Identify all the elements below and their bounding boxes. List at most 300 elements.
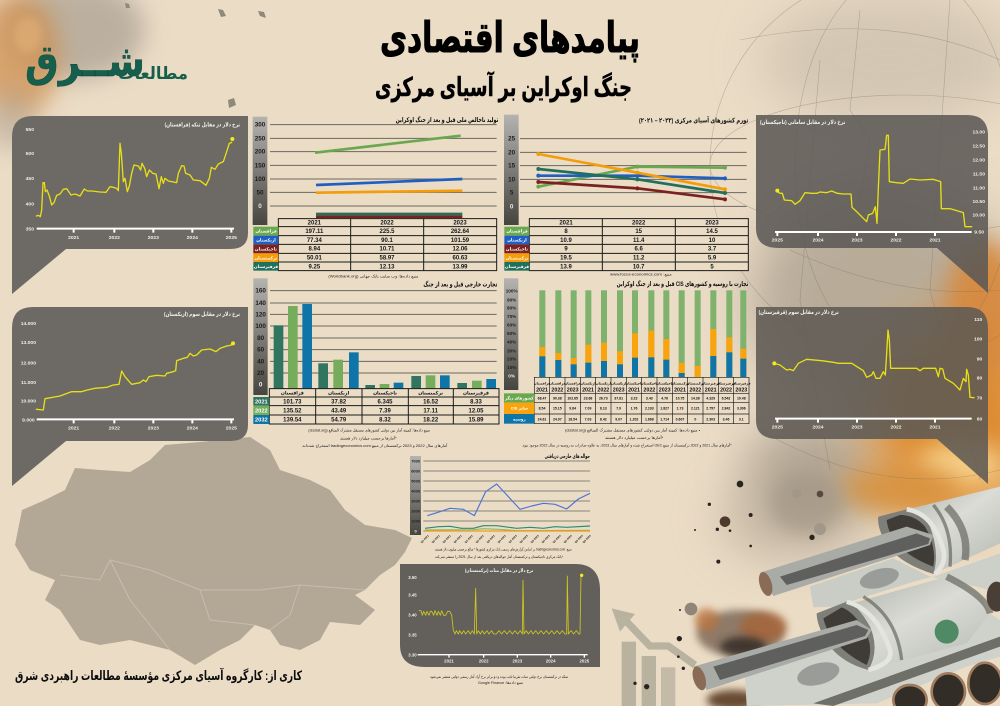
chart: trade with Russia and CIS: تاجیکستان <box>641 381 658 385</box>
logo: شــرق <box>25 37 145 87</box>
chart: trade with Russia and CIS: 2.121 <box>691 407 700 411</box>
panel: Tajikistan exchange rate: 12.50 <box>973 144 985 150</box>
panel: Uzbekistan exchange rate: 2024 <box>187 425 198 431</box>
panel: Turkmenistan exchange rate: نرخ دلار در مقابل منات (ترکمنستان) <box>465 568 533 574</box>
chart: trade with Russia and CIS: 2.842 <box>722 407 730 411</box>
chart: remittances: 1000 <box>411 518 421 523</box>
panel: Kyrgyzstan exchange rate: 90 <box>977 356 983 362</box>
chart: trade with Russia and CIS: 24.97 <box>553 417 562 421</box>
chart: trade with Russia and CIS: تاجیکستان <box>625 381 643 385</box>
chart: inflation <box>504 115 749 277</box>
chart: GDP: تاجیکستان <box>255 246 277 251</box>
chart: trade with Russia and CIS: 3.1 <box>739 417 744 421</box>
chart: foreign trade: 15.89 <box>469 418 484 424</box>
icon: rising arrow with bars <box>612 608 695 706</box>
chart: remittances: Q4-2024 <box>582 534 592 544</box>
panel: Kazakhstan exchange rate: 2021 <box>68 235 79 241</box>
chart: trade with Russia and CIS: 2023 <box>659 387 671 393</box>
bars <box>274 304 496 388</box>
chart: trade with Russia and CIS: 23.68 <box>584 396 592 400</box>
chart: foreign trade: 2021 <box>255 399 268 405</box>
chart: foreign trade: 8.32 <box>379 418 391 424</box>
chart: trade with Russia and CIS: 1.827 <box>660 407 669 411</box>
chart: GDP: 10.71 <box>380 247 395 253</box>
panel: Kazakhstan exchange rate <box>12 116 248 294</box>
chart: GDP: 50.01 <box>307 256 322 262</box>
chart: foreign trade: 37.82 <box>331 399 347 405</box>
chart: inflation: 15 <box>635 229 643 235</box>
chart: trade with Russia and CIS: قزاقستان <box>549 381 566 385</box>
chart: foreign trade: 140 <box>255 300 266 307</box>
panel: Kyrgyzstan exchange rate: 2024 <box>812 425 824 431</box>
chart: trade with Russia and CIS: 68.47 <box>538 396 546 400</box>
panel: Tajikistan exchange rate: 2022 <box>890 238 902 244</box>
panel: Turkmenistan exchange rate <box>400 564 600 667</box>
chart title: تورم کشورهای آسیای مرکزی (۲۰۲۳ – ۲۰۲۱) <box>639 116 749 125</box>
chart: foreign trade <box>253 278 499 448</box>
chart: remittances: Q1-2023 <box>508 534 518 544</box>
chart: trade with Russia and CIS: 2021 <box>582 387 594 393</box>
panel: Kazakhstan exchange rate: 2025 <box>226 235 237 241</box>
chart: trade with Russia and CIS: 50% <box>507 331 517 336</box>
chart: trade with Russia and CIS: 102.65 <box>567 396 578 400</box>
chart: inflation: قرقیزستان <box>505 264 529 269</box>
chart: inflation: 10.7 <box>633 264 645 270</box>
chart: foreign trade: 0 <box>259 382 263 389</box>
chart: foreign trade: 8.33 <box>470 399 482 405</box>
chart: trade with Russia and CIS: کشورهای دیگر <box>504 395 534 400</box>
chart: GDP: 2023 <box>453 221 467 227</box>
panel: Kazakhstan exchange rate: 450 <box>26 176 34 182</box>
panel: Tajikistan exchange rate: 9.50 <box>974 230 984 236</box>
chart: trade with Russia and CIS: روسیه <box>513 416 526 421</box>
source notes <box>522 427 732 448</box>
chart: trade with Russia and CIS: 3.306 <box>737 407 746 411</box>
panel: Uzbekistan exchange rate: 2021 <box>68 425 79 431</box>
chart: GDP: 262.64 <box>451 229 470 235</box>
panel: Kyrgyzstan exchange rate: 2023 <box>851 425 863 431</box>
panel: Turkmenistan exchange rate: 2022 <box>479 658 489 663</box>
chart: GDP: ترکمنستان <box>254 255 278 260</box>
source note: منبع: www.focus-economics.com <box>610 272 672 277</box>
chart: foreign trade: ترکمنستان <box>418 391 443 396</box>
chart: trade with Russia and CIS: 10% <box>507 365 517 370</box>
panel: Tajikistan exchange rate: 12.00 <box>973 158 985 164</box>
chart: trade with Russia and CIS: 100% <box>506 289 518 294</box>
chart: remittances: 7000 <box>411 458 421 463</box>
chart: trade with Russia and CIS: 40% <box>507 340 517 345</box>
source notes: *آمارها برحسب میلیارد دلار هستند <box>340 435 397 440</box>
chart: remittances: Q2-2021 <box>431 534 441 544</box>
chart: inflation: 25 <box>508 136 516 143</box>
source notes: آمارهای سال 2022 و 2023 ترکمنستان از منبع tradingeconomics.com استخراج شده‌اند. <box>301 443 448 448</box>
chart: remittances: Q4-2023 <box>541 534 551 544</box>
panel: Uzbekistan exchange rate: 13.000 <box>21 340 36 346</box>
chart: trade with Russia and CIS: 90.38 <box>553 396 562 400</box>
chart: trade with Russia and CIS: 80% <box>507 306 517 311</box>
chart: foreign trade: 139.54 <box>283 418 302 424</box>
panel: Tajikistan exchange rate: 11.50 <box>973 171 985 177</box>
chart: trade with Russia and CIS: 3.46 <box>723 417 729 421</box>
chart: foreign trade: قرقیزستان <box>463 391 489 396</box>
source notes: منبع داده‌ها: کمیته آمار بین دولتی کشورهای مستقل مشترک المنافع (cisstat.org) <box>308 428 430 433</box>
panel: Tajikistan exchange rate: 10.00 <box>973 213 985 219</box>
panel: Uzbekistan exchange rate: 2025 <box>226 425 237 431</box>
chart: trade with Russia and CIS: 8.54 <box>539 407 545 411</box>
chart: foreign trade: 60 <box>257 347 265 354</box>
chart: trade with Russia and CIS: 30% <box>507 348 517 353</box>
chart: trade with Russia and CIS: سایر CIS <box>511 406 528 411</box>
chart: GDP: 50 <box>256 189 264 196</box>
chart: trade with Russia and CIS: 2022 <box>597 387 609 393</box>
chart: GDP: 197.11 <box>305 229 324 235</box>
chart: trade with Russia and CIS: 60% <box>507 323 517 328</box>
chart: trade with Russia and CIS: 7.03 <box>585 417 591 421</box>
chart: remittances <box>410 454 592 559</box>
panel: Kyrgyzstan exchange rate: 60 <box>977 417 983 423</box>
chart: inflation: 0 <box>510 203 514 210</box>
source note: منبع داده‌ها: وب سایت بانک جهانی (Worldbank.org) <box>328 273 418 278</box>
panel: Tajikistan exchange rate: 13.00 <box>973 130 985 136</box>
chart: trade with Russia and CIS: 90% <box>507 297 517 302</box>
logo: مطالعات <box>118 64 188 83</box>
chart: trade with Russia and CIS: 8.42 <box>600 417 607 421</box>
panel: Tajikistan exchange rate: 11.00 <box>973 186 985 192</box>
chart: inflation: 15 <box>508 163 516 170</box>
debris <box>633 481 826 689</box>
chart: trade with Russia and CIS: 2023 <box>567 387 579 393</box>
panel: Uzbekistan exchange rate: 11.000 <box>21 380 36 386</box>
chart: foreign trade: 120 <box>255 311 266 318</box>
source notes: منبع: tradingeconomics.com بر اساس گزارش‌های رسمی بانک مرکزی کشورها * مبالغ برحسب میلیون دلار هستند <box>435 547 572 552</box>
chart title: تجارت با روسیه و کشورهای CIS قبل و بعد از جنگ اوکراین <box>617 279 749 288</box>
chart: trade with Russia and CIS: 1.202 <box>630 417 638 421</box>
chart: GDP: 225.5 <box>380 229 395 235</box>
source notes: *آمارها برحسب میلیارد دلار هستند <box>605 435 664 440</box>
chart: trade with Russia and CIS: قزاقستان <box>564 381 581 385</box>
chart: trade with Russia and CIS: 1.73 <box>677 407 683 411</box>
chart: GDP: 2022 <box>380 221 394 227</box>
panel: Tajikistan exchange rate: نرخ دلار در مقابل سامانی (تاجیکستان) <box>760 119 845 126</box>
stacked bars <box>539 290 746 377</box>
chart: foreign trade: 100 <box>255 323 266 330</box>
panel: Turkmenistan exchange rate: 2021 <box>444 658 454 663</box>
chart: GDP: 58.97 <box>380 256 395 262</box>
chart: foreign trade: 43.49 <box>331 408 347 414</box>
chart: remittances: 4000 <box>411 488 421 493</box>
chart: trade with Russia and CIS: 7.9 <box>616 407 621 411</box>
chart: foreign trade: 18.22 <box>423 418 439 424</box>
chart: remittances: Q1-2022 <box>464 534 474 544</box>
panel: Turkmenistan exchange rate: 2024 <box>546 658 556 663</box>
panel: Kyrgyzstan exchange rate: 70 <box>977 395 983 401</box>
panel: Uzbekistan exchange rate: نرخ دلار در مقابل سوم (ازبکستان) <box>164 311 240 318</box>
chart: trade with Russia and CIS: 37.81 <box>614 396 623 400</box>
chart: foreign trade: 80 <box>257 335 265 342</box>
chart: GDP: 100 <box>255 176 266 183</box>
panel: Kyrgyzstan exchange rate: 110 <box>974 317 983 323</box>
panel: Uzbekistan exchange rate: 2023 <box>148 425 159 431</box>
chart: inflation: 2022 <box>632 221 646 227</box>
chart: trade with Russia and CIS: 24.61 <box>538 417 546 421</box>
Turkmenistan source notes <box>430 674 569 685</box>
chart: foreign trade: 2022 <box>255 408 268 414</box>
chart: foreign trade: 54.79 <box>331 418 347 424</box>
chart: inflation: 14.5 <box>706 229 718 235</box>
chart: trade with Russia and CIS: 2022 <box>720 387 732 393</box>
panel: Tajikistan exchange rate <box>756 115 988 293</box>
chart: trade with Russia and CIS: 4.76 <box>661 396 668 400</box>
panel: Kazakhstan exchange rate: نرخ دلار در مقابل تنکه (قزاقستان) <box>165 122 240 129</box>
chart: GDP: 200 <box>255 149 266 156</box>
chart: inflation: 10 <box>508 176 516 183</box>
chart: inflation: تاجیکستان <box>506 246 528 251</box>
chart: inflation: 10.9 <box>560 238 572 244</box>
chart: remittances: 3000 <box>411 498 421 503</box>
chart: GDP: 13.99 <box>453 264 468 270</box>
chart: trade with Russia and CIS: 3.43 <box>646 396 653 400</box>
chart: trade with Russia and CIS: 2.757 <box>706 407 715 411</box>
chart: remittances: Q3-2021 <box>442 534 452 544</box>
chart: GDP: قرقیزستان <box>254 264 278 269</box>
chart: trade with Russia and CIS: 6.542 <box>722 396 730 400</box>
chart: trade with Russia and CIS: 2021 <box>674 387 686 393</box>
panel: Turkmenistan exchange rate: 3.45 <box>408 593 417 598</box>
chart: trade with Russia and CIS: ازبکستان <box>611 381 626 385</box>
chart: trade with Russia and CIS: 9.84 <box>569 407 576 411</box>
chart: trade with Russia and CIS: 2023 <box>735 387 747 393</box>
chart: trade with Russia and CIS: 2022 <box>689 387 701 393</box>
panel: Kazakhstan exchange rate: 400 <box>26 201 34 207</box>
chart: trade with Russia and CIS: 1.668 <box>645 417 654 421</box>
panel: Kazakhstan exchange rate: 2023 <box>148 235 159 241</box>
chart: trade with Russia and CIS: 2021 <box>628 387 640 393</box>
chart: GDP: 2021 <box>308 221 322 227</box>
chart: foreign trade: تاجیکستان <box>373 391 397 396</box>
chart: foreign trade: 17.11 <box>423 408 439 414</box>
chart: trade with Russia and CIS: 26.73 <box>599 396 608 400</box>
chart: inflation: 3.7 <box>708 247 717 253</box>
chart: GDP: 250 <box>255 135 266 142</box>
chart: foreign trade: 16.52 <box>423 399 439 405</box>
source notes: *آمارهای سال 2021 و 2022 ترکمنستان از منبع OEC استخراج شده و آمارهای سال 2023، به علاوه صادرات به روسیه در سال 2022 موجود نبود. <box>522 443 732 448</box>
chart: inflation: 20 <box>508 149 516 156</box>
chart: trade with Russia and CIS: تاجیکستان <box>656 381 673 385</box>
panel: Kazakhstan exchange rate: 2024 <box>187 235 198 241</box>
upper rolled note <box>756 487 1000 607</box>
chart: inflation: ترکمنستان <box>505 255 529 260</box>
chart: trade with Russia and CIS: 10.75 <box>676 396 684 400</box>
chart: GDP: 77.34 <box>307 238 322 244</box>
chart: inflation: 2021 <box>559 221 573 227</box>
chart: inflation: 19.5 <box>560 256 572 262</box>
panel: Turkmenistan exchange rate: 3.50 <box>408 575 417 580</box>
panel: Turkmenistan exchange rate: 3.40 <box>408 613 417 618</box>
panel: Kazakhstan exchange rate: 2022 <box>109 235 120 241</box>
chart: trade with Russia and CIS: 70% <box>507 314 517 319</box>
chart: trade with Russia and CIS: 1.76 <box>631 407 637 411</box>
chart: trade with Russia and CIS <box>504 278 751 448</box>
chart: trade with Russia and CIS: 10.48 <box>737 396 746 400</box>
panel: Kyrgyzstan exchange rate: نرخ دلار در مقابل سوم (قرقیزستان) <box>759 310 839 316</box>
chart: foreign trade: 20 <box>257 370 265 377</box>
chart: inflation: 9 <box>564 247 568 253</box>
chart: foreign trade: 2032 <box>255 418 268 424</box>
chart: trade with Russia and CIS: 3.23 <box>631 396 637 400</box>
chart: foreign trade: 101.73 <box>283 399 302 405</box>
panel: Tajikistan exchange rate: 2021 <box>929 238 941 244</box>
chart: trade with Russia and CIS: 18.54 <box>568 417 577 421</box>
source notes: • منبع داده‌ها: کمیته آمار بین دولتی کشورهای مستقل مشترک المنافع (cisstat.org) <box>565 427 701 432</box>
source notes <box>301 428 448 448</box>
chart: remittances: Q2-2024 <box>563 534 573 544</box>
chart: trade with Russia and CIS: ازبکستان <box>580 381 596 385</box>
chart title: حواله های خارجی دریافتی <box>545 454 590 460</box>
subtitle: جنگ اوکراین بر آسیای مرکزی <box>375 71 632 103</box>
chart: GDP: 150 <box>255 162 266 169</box>
chart: inflation: 5 <box>710 264 714 270</box>
chart: foreign trade: قزاقستان <box>281 391 304 396</box>
chart: trade with Russia and CIS: ترکمنستان <box>686 381 704 385</box>
chart: trade with Russia and CIS: 2021 <box>536 387 548 393</box>
chart: trade with Russia and CIS: 0 <box>694 417 696 421</box>
chart: GDP: 12.06 <box>453 247 468 253</box>
panel: Kazakhstan exchange rate: 350 <box>26 227 34 233</box>
chart: GDP: قزاقستان <box>255 229 277 234</box>
chart: GDP: 12.13 <box>380 264 395 270</box>
chart: remittances: 6000 <box>411 468 421 473</box>
panel: Kyrgyzstan exchange rate: 80 <box>977 375 983 381</box>
panel: Tajikistan exchange rate: 10.50 <box>973 199 985 205</box>
chart: trade with Russia and CIS: 7.09 <box>585 407 591 411</box>
panel: Kazakhstan exchange rate: 500 <box>26 151 34 157</box>
source notes <box>435 547 572 559</box>
chart: trade with Russia and CIS: 2023 <box>613 387 625 393</box>
chart: trade with Russia and CIS: ازبکستان <box>596 381 611 385</box>
chart: trade with Russia and CIS: 4.329 <box>706 396 715 400</box>
chart: GDP: 9.25 <box>309 264 321 270</box>
chart: trade with Russia and CIS: 14.38 <box>691 396 700 400</box>
chart: remittances: Q3-2022 <box>486 534 496 544</box>
panel: Turkmenistan exchange rate: 3.30 <box>408 653 417 658</box>
credit line: کاری از: کارگروه آسیای مرکزی مؤسسهٔ مطالعات راهبردی شرق <box>15 667 302 683</box>
chart: remittances: 0 <box>415 528 418 533</box>
chart: remittances: Q3-2023 <box>530 534 540 544</box>
chart: trade with Russia and CIS: 2021 <box>705 387 717 393</box>
panel: Turkmenistan exchange rate: 2025 <box>580 658 590 663</box>
panel: Tajikistan exchange rate: 2025 <box>772 238 783 244</box>
Turkmenistan source notes: سکه در ترکمنستان نرخ دولتی منات تقریبا ثابت بوده و دو برابر نرخ آزاد آمار رسمی دولتی منتشر نمی‌شود <box>430 674 569 679</box>
chart: trade with Russia and CIS: 2.193 <box>645 407 654 411</box>
chart: trade with Russia and CIS: 2022 <box>551 387 563 393</box>
chart: inflation: 6.6 <box>635 247 643 253</box>
chart: foreign trade: 160 <box>255 288 266 295</box>
chart: inflation: ازبکستان <box>507 238 527 243</box>
panel: Kyrgyzstan exchange rate: 2025 <box>772 425 783 431</box>
chart: trade with Russia and CIS: 15.15 <box>553 407 562 411</box>
panel: Kyrgyzstan exchange rate: 2021 <box>929 425 941 431</box>
chart: foreign trade: 12.05 <box>469 408 484 414</box>
chart: foreign trade: 7.39 <box>379 408 391 414</box>
chart: foreign trade: 135.52 <box>283 408 302 414</box>
chart: remittances: Q1-2021 <box>420 534 430 544</box>
chart: foreign trade: 40 <box>257 358 265 365</box>
rolled dollar cannons illustration <box>612 473 1000 706</box>
chart: trade with Russia and CIS: 1.714 <box>660 417 669 421</box>
chart: remittances: Q3-2024 <box>574 534 584 544</box>
chart: inflation: قزاقستان <box>506 229 528 234</box>
chart: GDP: 60.63 <box>453 256 468 262</box>
chart: trade with Russia and CIS: قرقیزستان <box>717 381 735 385</box>
panel: Uzbekistan exchange rate: 9.000 <box>22 418 35 424</box>
chart: inflation: 8 <box>564 229 568 235</box>
globe lines <box>710 0 1000 480</box>
panel: Turkmenistan exchange rate: 2023 <box>513 658 523 663</box>
panel: Kyrgyzstan exchange rate <box>756 307 988 484</box>
explosion smoke <box>695 473 843 706</box>
chart title: تجارت خارجی قبل و بعد از جنگ <box>423 280 498 289</box>
panel: Tajikistan exchange rate: 2024 <box>812 238 824 244</box>
chart: remittances: Q2-2023 <box>519 534 529 544</box>
chart: trade with Russia and CIS: قرقیزستان <box>732 381 751 385</box>
chart: GDP: 101.59 <box>451 238 470 244</box>
rolled ends <box>893 582 1000 706</box>
map of Central Asia <box>15 437 412 665</box>
remittance lines <box>425 484 590 531</box>
panel: Uzbekistan exchange rate: 2022 <box>109 425 120 431</box>
chart: remittances: 2000 <box>411 508 421 513</box>
title: پیامدهای اقتصادی <box>380 14 640 63</box>
chart: GDP <box>253 115 499 278</box>
chart: foreign trade: 6.345 <box>378 399 393 405</box>
chart: inflation: 10 <box>709 238 716 244</box>
panel: Turkmenistan exchange rate: 3.35 <box>408 633 417 638</box>
chart: trade with Russia and CIS: ترکمنستان <box>671 381 689 385</box>
panel: Tajikistan exchange rate: 2023 <box>851 238 863 244</box>
chart: GDP: 8.94 <box>309 247 321 253</box>
chart: remittances: Q4-2021 <box>453 534 463 544</box>
panel: Kyrgyzstan exchange rate: 100 <box>974 337 983 343</box>
panel: Kazakhstan exchange rate: 550 <box>26 127 34 133</box>
chart: inflation: 11.4 <box>633 238 645 244</box>
chart: trade with Russia and CIS: 2022 <box>643 387 655 393</box>
panel: Uzbekistan exchange rate: 10.000 <box>21 399 36 405</box>
chart: remittances: Q4-2022 <box>497 534 507 544</box>
lower rolled note <box>690 577 1000 706</box>
chart: GDP: 300 <box>255 122 266 129</box>
chart: trade with Russia and CIS: 8.13 <box>600 407 607 411</box>
chart: GDP: ازبکستان <box>256 238 276 243</box>
panel: Uzbekistan exchange rate <box>12 307 248 486</box>
Turkmenistan source notes: منبع داده‌ها: Google Finance <box>478 680 523 685</box>
chart: GDP: 90.1 <box>381 238 393 244</box>
chart: trade with Russia and CIS: 2.303 <box>706 417 715 421</box>
chart: inflation: 2023 <box>705 221 719 227</box>
chart: trade with Russia and CIS: 9.07 <box>615 417 622 421</box>
chart: inflation: 5.9 <box>708 256 717 262</box>
chart: remittances: Q1-2024 <box>552 534 562 544</box>
panel: Uzbekistan exchange rate: 14.000 <box>21 321 36 327</box>
inflation lines <box>538 154 725 199</box>
source notes: *بانک مرکزی تاجیکستان و ترکمنستان آمار حواله‌های دریافتی بعد از سال 2021 را منتشر نمی‌کند <box>435 554 564 559</box>
chart: inflation: 13.9 <box>560 264 572 270</box>
chart: trade with Russia and CIS: قرقیزستان <box>701 381 720 385</box>
panel: Kyrgyzstan exchange rate: 2022 <box>890 425 902 431</box>
chart: trade with Russia and CIS: 0% <box>508 374 516 379</box>
chart title: تولید ناخالص ملی قبل و بعد از جنگ اوکراین <box>396 115 499 124</box>
chart: trade with Russia and CIS: قزاقستان <box>534 381 550 385</box>
chart: remittances: Q2-2022 <box>475 534 485 544</box>
